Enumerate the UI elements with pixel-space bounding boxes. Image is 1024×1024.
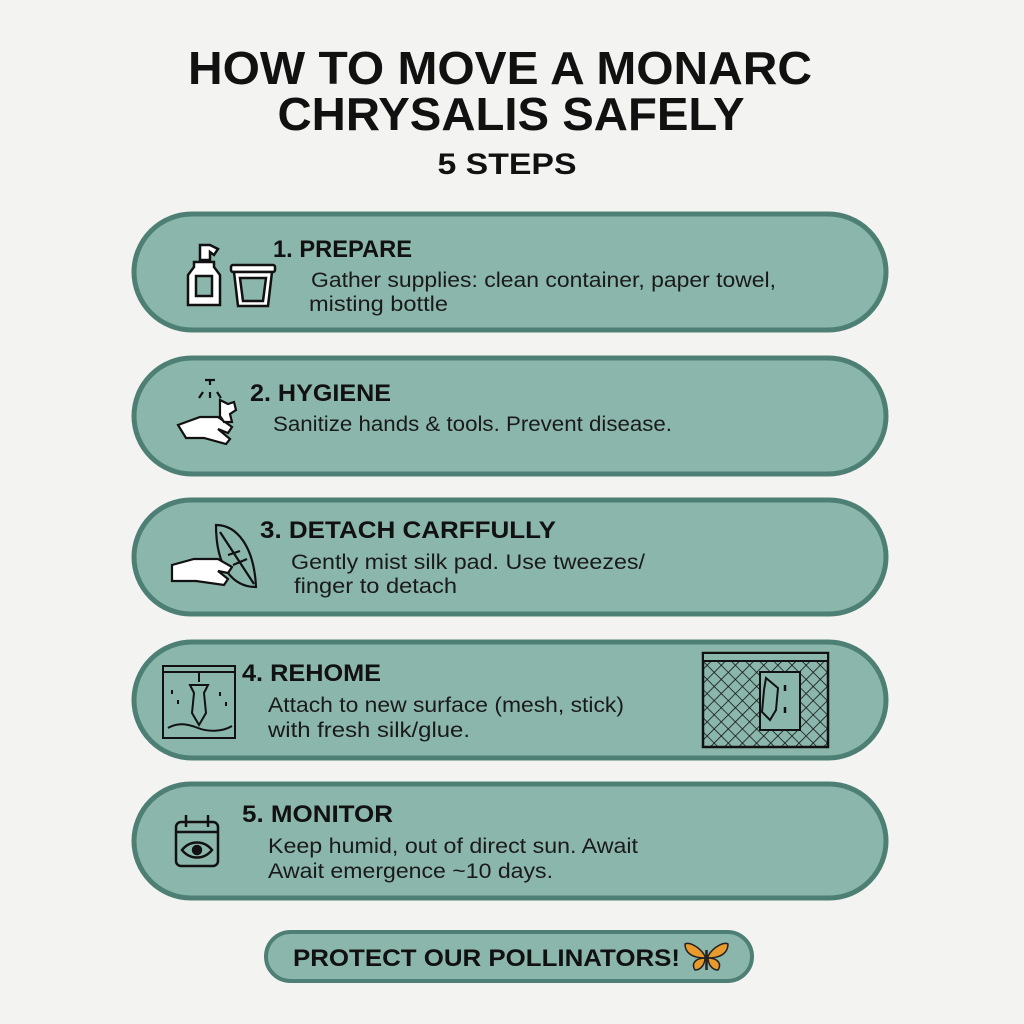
panel: step 1 prepare: Gather supplies: clean container, paper towel, [311,269,776,292]
icon: mesh enclosure [703,653,828,747]
icon: chrysalis in box [163,666,235,738]
panel: step 4 rehome: with fresh silk/glue. [267,719,470,742]
title: HOW TO MOVE A MONARC [188,42,812,94]
panel: step 3 detach: Gently mist silk pad. Use tweezes/ [291,551,645,574]
panel: step 5 monitor: 5. MONITOR [242,801,393,828]
panel: step 5 monitor: Keep humid, out of direct sun. Await [268,835,638,858]
callout: protect our pollinators: PROTECT OUR POLLINATORS! [293,945,680,972]
title: 5 STEPS [438,148,576,181]
panel: step 2 hygiene: 2. HYGIENE [250,380,391,407]
panel: step 2 hygiene: Sanitize hands & tools. Prevent disease. [273,413,672,436]
panel: step 1 prepare: 1. PREPARE [273,236,412,263]
title: CHRYSALIS SAFELY [278,88,744,140]
icon: spray bottle and container [188,245,275,306]
icon: butterfly [685,944,728,970]
icon: calendar with eye [176,815,218,866]
panel: step 3 detach: finger to detach [294,575,457,598]
panel: step 4 rehome: 4. REHOME [242,660,381,687]
panel: step 4 rehome [134,642,886,758]
panel: step 1 prepare [134,214,886,330]
panel: step 5 monitor [134,784,886,898]
panel: step 1 prepare: misting bottle [309,293,448,316]
panel: step 4 rehome: Attach to new surface (mesh, stick) [268,694,624,717]
icon: hand with leaf [172,525,256,587]
icon: washing hands [178,380,236,444]
panel: step 5 monitor: Await emergence ~10 days. [268,860,553,883]
callout: protect our pollinators [266,932,752,981]
panel: step 3 detach: 3. DETACH CARFFULLY [260,517,556,544]
title [188,42,812,181]
panel: step 2 hygiene [134,358,886,474]
panel: step 3 detach [134,500,886,614]
